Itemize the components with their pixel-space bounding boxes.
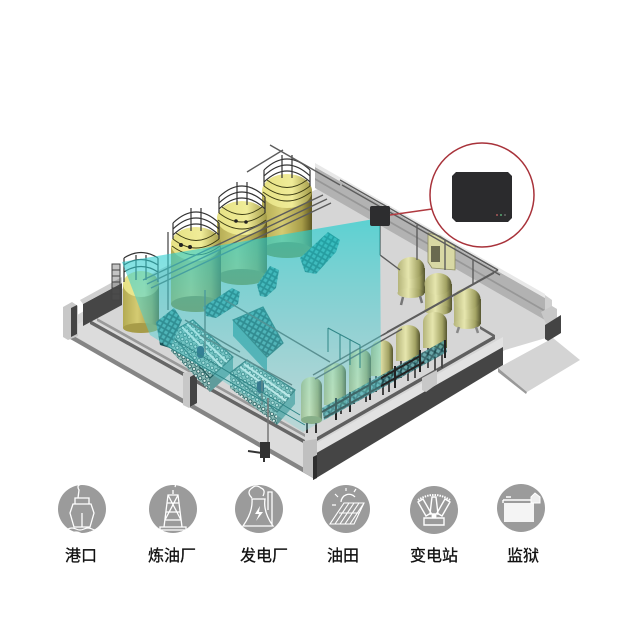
label: power plant: 发电厂 — [240, 547, 288, 565]
vessel five — [396, 325, 420, 381]
pump cluster front — [203, 288, 240, 318]
vessel three — [454, 288, 481, 333]
rack B — [230, 360, 295, 425]
label: prison: 监狱 — [507, 547, 539, 565]
icon: ship — [58, 482, 106, 534]
scenario: power plant — [235, 485, 288, 565]
callout connector line — [390, 209, 432, 215]
control cabinet — [428, 233, 455, 270]
right end post — [541, 306, 561, 341]
rack A — [170, 320, 233, 392]
tank 2 — [217, 182, 267, 285]
pump cluster back — [300, 232, 340, 274]
valve assembly at front edge — [248, 398, 270, 462]
water treatment racks — [156, 232, 340, 425]
vessel eight — [324, 363, 346, 416]
ramp — [498, 338, 580, 394]
callout: device magnifier — [390, 143, 534, 247]
label: refinery: 炼油厂 — [148, 547, 196, 565]
scenario: port — [58, 482, 106, 565]
tank 4 with ladder cage — [112, 252, 159, 333]
concrete base and floor — [63, 180, 556, 478]
label: oil field: 油田 — [327, 547, 359, 565]
magnifier circle — [430, 143, 534, 247]
icon: transformer — [410, 486, 458, 534]
label: port: 港口 — [65, 547, 97, 565]
vessel seven — [349, 349, 371, 404]
front-right dark wall — [303, 347, 503, 480]
storage tanks — [112, 155, 312, 333]
tank 3 — [171, 208, 221, 312]
vessel nine — [301, 377, 322, 433]
application scenarios row — [58, 482, 545, 565]
vessel two — [424, 273, 452, 315]
front pipes and cage over beam — [165, 328, 360, 425]
pipe network — [143, 145, 500, 405]
icon: cooling tower — [235, 485, 283, 533]
tank 1 — [262, 155, 312, 258]
vertical pressure vessels — [301, 233, 481, 433]
teal sensor coverage beam — [122, 218, 381, 432]
scenario: substation — [410, 486, 458, 565]
front dividing post — [183, 371, 197, 408]
icon: derrick — [149, 483, 197, 533]
vessel six — [371, 340, 393, 395]
vessel four — [423, 312, 447, 370]
wall mounted sensor device — [370, 206, 390, 226]
vessel one — [398, 257, 425, 305]
label: substation: 变电站 — [410, 547, 458, 565]
pump row along front — [322, 340, 447, 420]
rack C — [233, 307, 283, 372]
blue cylinder two — [257, 381, 264, 393]
scenario: oil field — [322, 485, 370, 565]
factory plant isometric illustration — [63, 145, 580, 480]
scenario: prison — [497, 484, 545, 565]
blue cylinder one — [197, 346, 204, 358]
left wall — [63, 277, 122, 340]
back wall — [315, 163, 552, 325]
icon: wall and watchtower — [497, 484, 545, 532]
icon: solar panel and sun — [322, 485, 370, 533]
enlarged black device — [452, 172, 512, 222]
pump cluster near tank four — [156, 308, 182, 348]
scenario: refinery — [148, 483, 197, 565]
pump cluster middle — [257, 266, 279, 297]
